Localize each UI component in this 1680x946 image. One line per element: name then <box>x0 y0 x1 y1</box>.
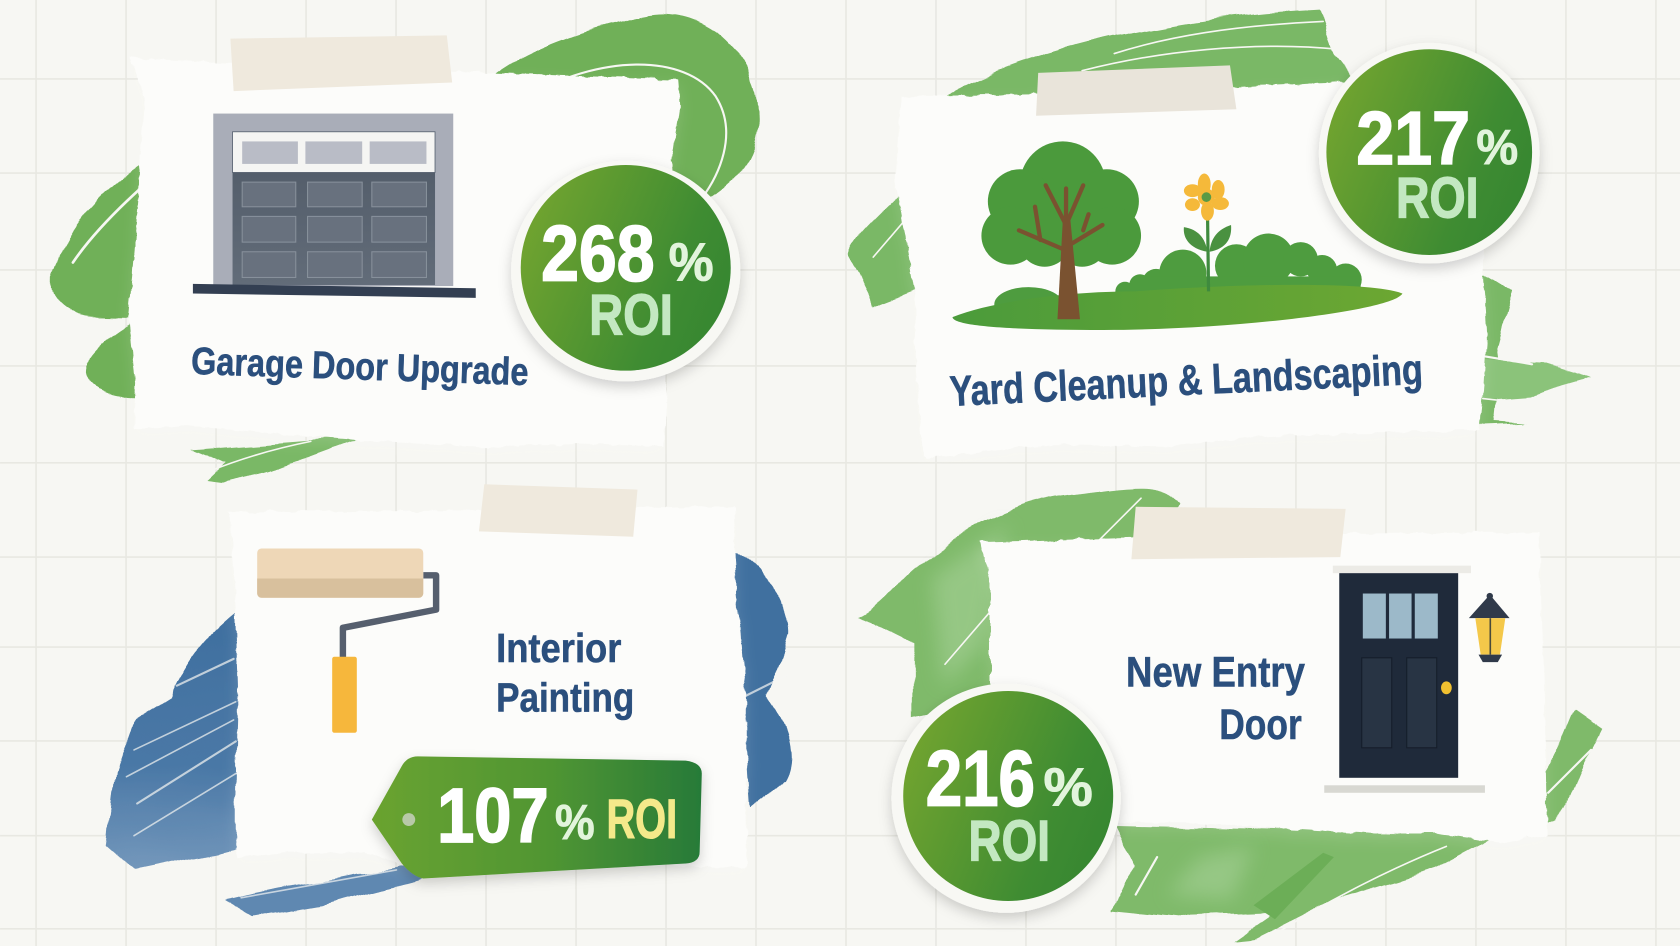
price tag: 107% ROI: % <box>555 795 595 850</box>
badge: 268% ROI: 268 <box>541 209 655 298</box>
icon: paint roller <box>257 549 436 733</box>
tape: painting card <box>479 484 638 537</box>
price tag: 107% ROI: ROI <box>606 788 677 850</box>
badge: 216% ROI: % <box>1044 759 1093 818</box>
heading: new entry door: New Entry <box>1126 649 1305 697</box>
torn paper: garage card <box>129 58 680 447</box>
heading: new entry door: Door <box>1219 701 1302 749</box>
heading: yard cleanup and landscaping: Yard Cleanup & Landscaping <box>949 346 1424 416</box>
brush strokes: garage card <box>51 14 759 482</box>
tree foliage <box>981 141 1141 267</box>
icon: front door <box>1324 566 1485 793</box>
price tag: 107% ROI <box>372 756 702 879</box>
torn paper: yard card <box>896 80 1489 459</box>
panel: interior painting <box>107 484 791 917</box>
flower <box>1184 174 1231 291</box>
icon: tree, flower and shrubs <box>952 141 1402 330</box>
heading: interior painting: Painting <box>496 674 634 720</box>
badge: 268% ROI <box>511 161 740 381</box>
heading: new entry door <box>1126 649 1305 749</box>
heading: garage door upgrade: Garage Door Upgrade <box>190 340 529 394</box>
badge: 268% ROI: ROI <box>589 283 673 347</box>
brush strokes: painting card <box>107 549 791 917</box>
badge: 216% ROI: 216 <box>926 734 1035 823</box>
ground <box>952 285 1402 330</box>
badge: 268% ROI: % <box>669 234 714 293</box>
badge: 217% ROI <box>1319 43 1540 264</box>
torn paper: door card <box>980 532 1547 843</box>
panel: yard cleanup and landscaping <box>846 9 1592 459</box>
tape: garage card <box>230 35 452 91</box>
badge: 217% ROI: 217 <box>1356 96 1470 180</box>
badge: 217% ROI: ROI <box>1396 166 1479 230</box>
tree trunk <box>1019 185 1102 319</box>
badge: 216% ROI <box>891 684 1121 913</box>
heading: interior painting: Interior <box>496 625 622 671</box>
tape: yard card <box>1036 65 1236 116</box>
torn paper: painting card <box>229 507 747 868</box>
badge: 216% ROI: ROI <box>969 809 1050 873</box>
shrubs <box>994 234 1362 321</box>
heading: interior painting <box>496 625 634 720</box>
brush strokes: door card <box>859 487 1603 943</box>
tape: door card <box>1131 507 1346 559</box>
panel: new entry door <box>859 487 1603 943</box>
icon: lantern <box>1469 593 1510 662</box>
badge: 217% ROI: % <box>1476 120 1518 175</box>
icon: garage door <box>193 114 476 298</box>
price tag: 107% ROI: 107 <box>437 773 549 859</box>
panel: garage door upgrade <box>51 14 759 482</box>
brush strokes: yard card <box>846 9 1592 424</box>
